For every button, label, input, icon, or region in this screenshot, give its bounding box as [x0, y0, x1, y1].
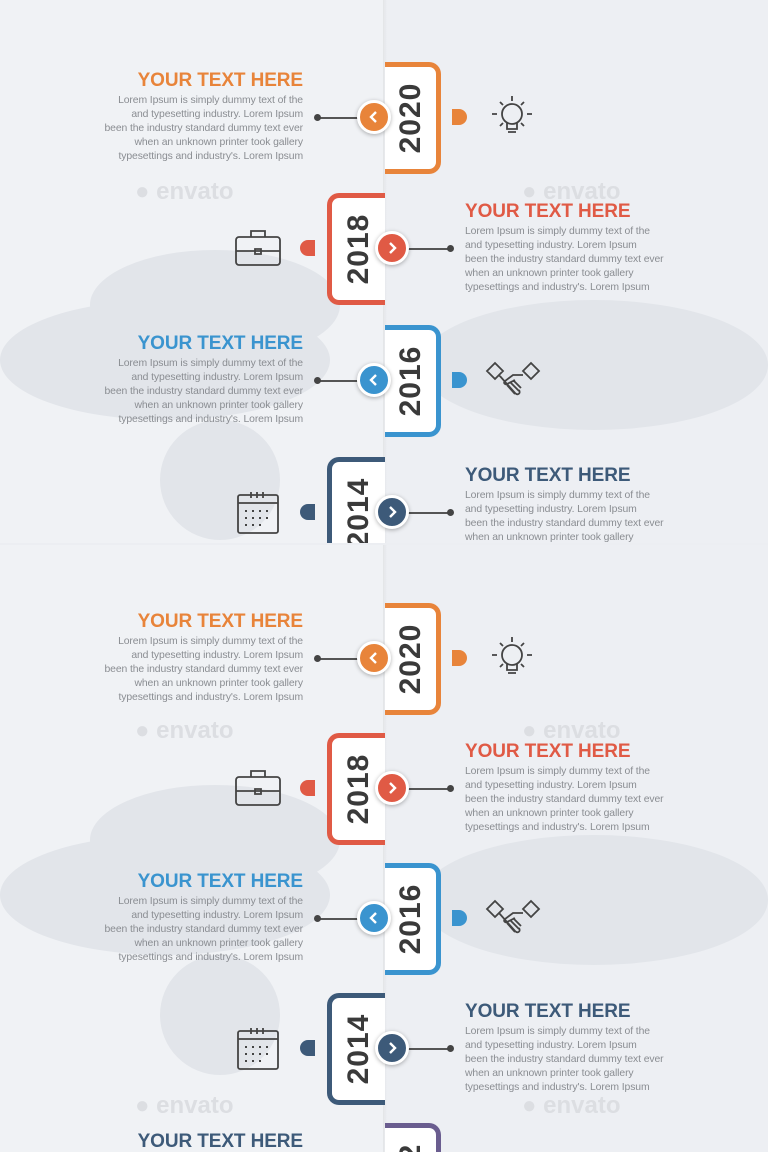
entry: 2016: and typesetting industry. Lorem Ipsum — [131, 372, 303, 383]
entry: 2014: and typesetting industry. Lorem Ipsum — [465, 504, 637, 515]
year card: 2020 — [394, 83, 426, 153]
circle chevron — [357, 100, 391, 134]
entry: 2016: and typesetting industry. Lorem Ipsum — [131, 910, 303, 921]
entry: 2020: Lorem Ipsum is simply dummy text of the — [118, 636, 303, 647]
entry: 2014: 2014 — [342, 1014, 374, 1084]
section: bottom timeline: ● envato — [135, 1092, 234, 1119]
entry: 2014: and typesetting industry. Lorem Ipsum — [465, 1040, 637, 1051]
entry: 2014: YOUR TEXT HERE — [465, 1001, 630, 1022]
entry: 2016: been the industry standard dummy text ever — [104, 924, 303, 935]
entry: 2018: and typesetting industry. Lorem Ipsum — [465, 780, 637, 791]
entry: 2018: typesettings and industry's. Lorem Ipsum — [465, 282, 650, 293]
icon: briefcase — [235, 230, 281, 266]
section: top timeline — [0, 0, 768, 543]
icon: briefcase — [235, 770, 281, 806]
section: bottom timeline: ● envato — [522, 1092, 621, 1119]
entry: 2018: been the industry standard dummy text ever — [465, 254, 664, 265]
icon: calendar — [237, 1028, 279, 1070]
icon: bulb — [492, 96, 532, 133]
icon: handshake — [486, 900, 540, 934]
entry: 2020: YOUR TEXT HERE — [138, 611, 303, 632]
entry: 2020 — [104, 603, 532, 715]
entry: 2018: and typesetting industry. Lorem Ipsum — [465, 240, 637, 251]
section: bottom timeline: ● envato — [135, 717, 234, 744]
entry: 2016: when an unknown printer took gallery — [134, 400, 303, 411]
text block left: YOUR TEXT HERE — [138, 70, 303, 91]
entry: 2016: 2016 — [394, 884, 426, 954]
entry: 2016: been the industry standard dummy text ever — [104, 386, 303, 397]
section: bottom timeline: ● envato — [522, 717, 621, 744]
entry: 2018: when an unknown printer took gallery — [465, 268, 634, 279]
entry: 2014: when an unknown printer took gallery — [465, 1068, 634, 1079]
entry: 2020: when an unknown printer took gallery — [134, 678, 303, 689]
entry: 2020: and typesetting industry. Lorem Ipsum — [131, 650, 303, 661]
entry: 2018: Lorem Ipsum is simply dummy text of the — [465, 766, 650, 777]
entry: 2014 — [237, 457, 664, 543]
entry: 2016: YOUR TEXT HERE — [138, 333, 303, 354]
entry: 2014: Lorem Ipsum is simply dummy text of the — [465, 490, 650, 501]
icon: calendar — [237, 492, 279, 534]
text block left: and typesetting industry. Lorem Ipsum — [131, 109, 303, 120]
text block left: typesettings and industry's. Lorem Ipsum — [118, 151, 303, 162]
entry: 2014: been the industry standard dummy text ever — [465, 518, 664, 529]
section: top timeline: ● envato — [135, 178, 234, 205]
entry: 2016: YOUR TEXT HERE — [138, 871, 303, 892]
text block left — [104, 70, 303, 162]
entry: 2018: 2018 — [342, 754, 374, 824]
entry: 2018 — [235, 733, 664, 845]
icon: bulb — [492, 637, 532, 674]
entry: 2016: Lorem Ipsum is simply dummy text of the — [118, 358, 303, 369]
entry: 2018 — [235, 193, 664, 305]
icon: handshake — [486, 362, 540, 396]
entry: 2014: when an unknown printer took gallery — [465, 532, 634, 543]
entry: 2018: 2018 — [342, 214, 374, 284]
text block left: been the industry standard dummy text ever — [104, 123, 303, 134]
entry: 2018: when an unknown printer took gallery — [465, 808, 634, 819]
entry: 2018: YOUR TEXT HERE — [465, 741, 630, 762]
entry: 2018: Lorem Ipsum is simply dummy text of the — [465, 226, 650, 237]
entry: 2018: been the industry standard dummy text ever — [465, 794, 664, 805]
entry: 2012 partial: YOUR TEXT HERE — [138, 1131, 303, 1152]
entry: 2020: typesettings and industry's. Lorem Ipsum — [118, 692, 303, 703]
entry: 2020: been the industry standard dummy text ever — [104, 664, 303, 675]
entry: 2016: typesettings and industry's. Lorem Ipsum — [118, 952, 303, 963]
entry: 2012 partial — [138, 1123, 441, 1152]
entry: 2014: YOUR TEXT HERE — [465, 465, 630, 486]
entry: 2014 — [237, 993, 664, 1105]
entry: 2014: Lorem Ipsum is simply dummy text of the — [465, 1026, 650, 1037]
text block left: Lorem Ipsum is simply dummy text of the — [118, 95, 303, 106]
section: top timeline: ● envato — [522, 178, 621, 205]
text block left: when an unknown printer took gallery — [134, 137, 303, 148]
entry: 2018: YOUR TEXT HERE — [465, 201, 630, 222]
entry: 2016 — [104, 325, 540, 437]
entry: 2020 — [104, 62, 532, 174]
entry: 2020: 2020 — [394, 624, 426, 694]
entry: 2016: Lorem Ipsum is simply dummy text of the — [118, 896, 303, 907]
year card — [385, 62, 441, 174]
entry: 2016: 2016 — [394, 346, 426, 416]
section: bottom timeline — [0, 545, 768, 1152]
entry: 2014: typesettings and industry's. Lorem Ipsum — [465, 1082, 650, 1093]
entry: 2016: typesettings and industry's. Lorem Ipsum — [118, 414, 303, 425]
entry: 2016 — [104, 863, 540, 975]
entry: 2018: typesettings and industry's. Lorem Ipsum — [465, 822, 650, 833]
entry: 2014: been the industry standard dummy text ever — [465, 1054, 664, 1065]
entry: 2016: when an unknown printer took gallery — [134, 938, 303, 949]
